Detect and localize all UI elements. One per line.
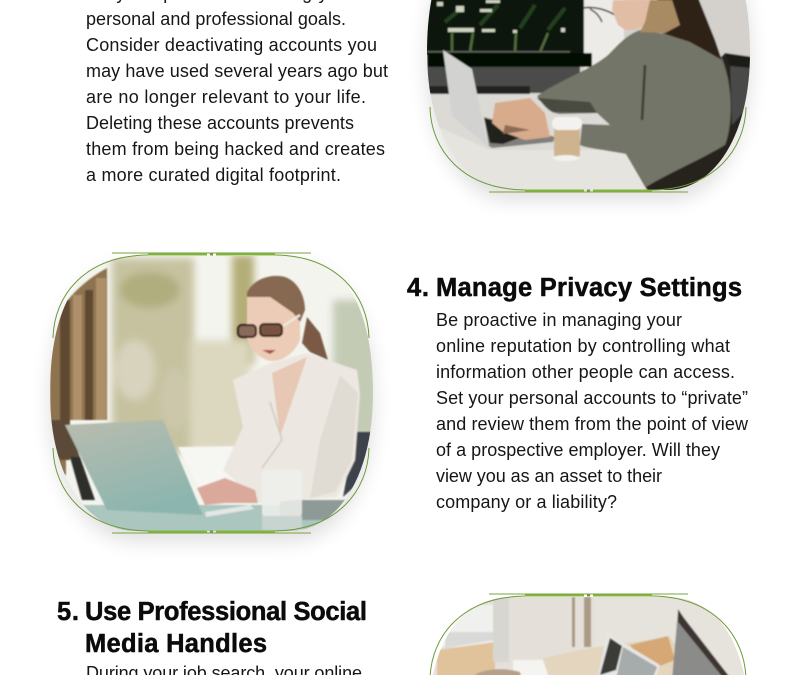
- text block: step 4 body: view you as an asset to their: [436, 466, 662, 486]
- text block: step 4 body: and review them from the point of view: [436, 414, 749, 434]
- text block: step 3 body: are no longer relevant to your life.: [86, 87, 366, 107]
- heading: Use Professional Social Media Handles: [57, 598, 367, 658]
- text block: step 3 body: personal and professional goals.: [86, 9, 346, 29]
- photo: woman in olive shirt typing at laptop: [420, 0, 760, 200]
- heading: Manage Privacy Settings: Manage Privacy Settings: [436, 274, 742, 302]
- heading: Use Professional Social Media Handles: Media Handles: [85, 630, 267, 658]
- text block: step 4 body: Be proactive in managing your: [436, 310, 682, 330]
- photo: woman in white blazer with glasses at laptop: [50, 253, 378, 541]
- panel: step 5 text: [57, 598, 367, 675]
- panel: step 3 continuation text: [86, 0, 388, 185]
- heading: Manage Privacy Settings: 4.: [407, 274, 429, 302]
- text block: step 3 body: [86, 0, 388, 185]
- text block: step 3 body: Deleting these accounts prevents: [86, 113, 354, 133]
- heading: Use Professional Social Media Handles: 5.: [57, 598, 79, 626]
- text block: step 3 body: may have used several years ago but: [86, 61, 388, 81]
- text block: step 3 body: Consider deactivating accounts you: [86, 35, 377, 55]
- text block: step 4 body: online reputation by controlling what: [436, 336, 730, 356]
- text block: step 4 body: [436, 310, 749, 512]
- blurred window background: [112, 255, 378, 453]
- text block: step 4 body: company or a liability?: [436, 492, 617, 512]
- photo: desk with laptop and monitor: [430, 594, 746, 675]
- panel: step 4 text: [407, 274, 749, 512]
- text block: step 3 body: them from being hacked and creates: [86, 139, 385, 159]
- text block: step 4 body: of a prospective employer. Will they: [436, 440, 720, 460]
- text block: step 4 body: Set your personal accounts to “private”: [436, 388, 748, 408]
- text block: step 3 body: a more curated digital footprint.: [86, 165, 341, 185]
- text block: step 4 body: information other people can access.: [436, 362, 735, 382]
- heading: Use Professional Social Media Handles: Use Professional Social: [85, 598, 367, 626]
